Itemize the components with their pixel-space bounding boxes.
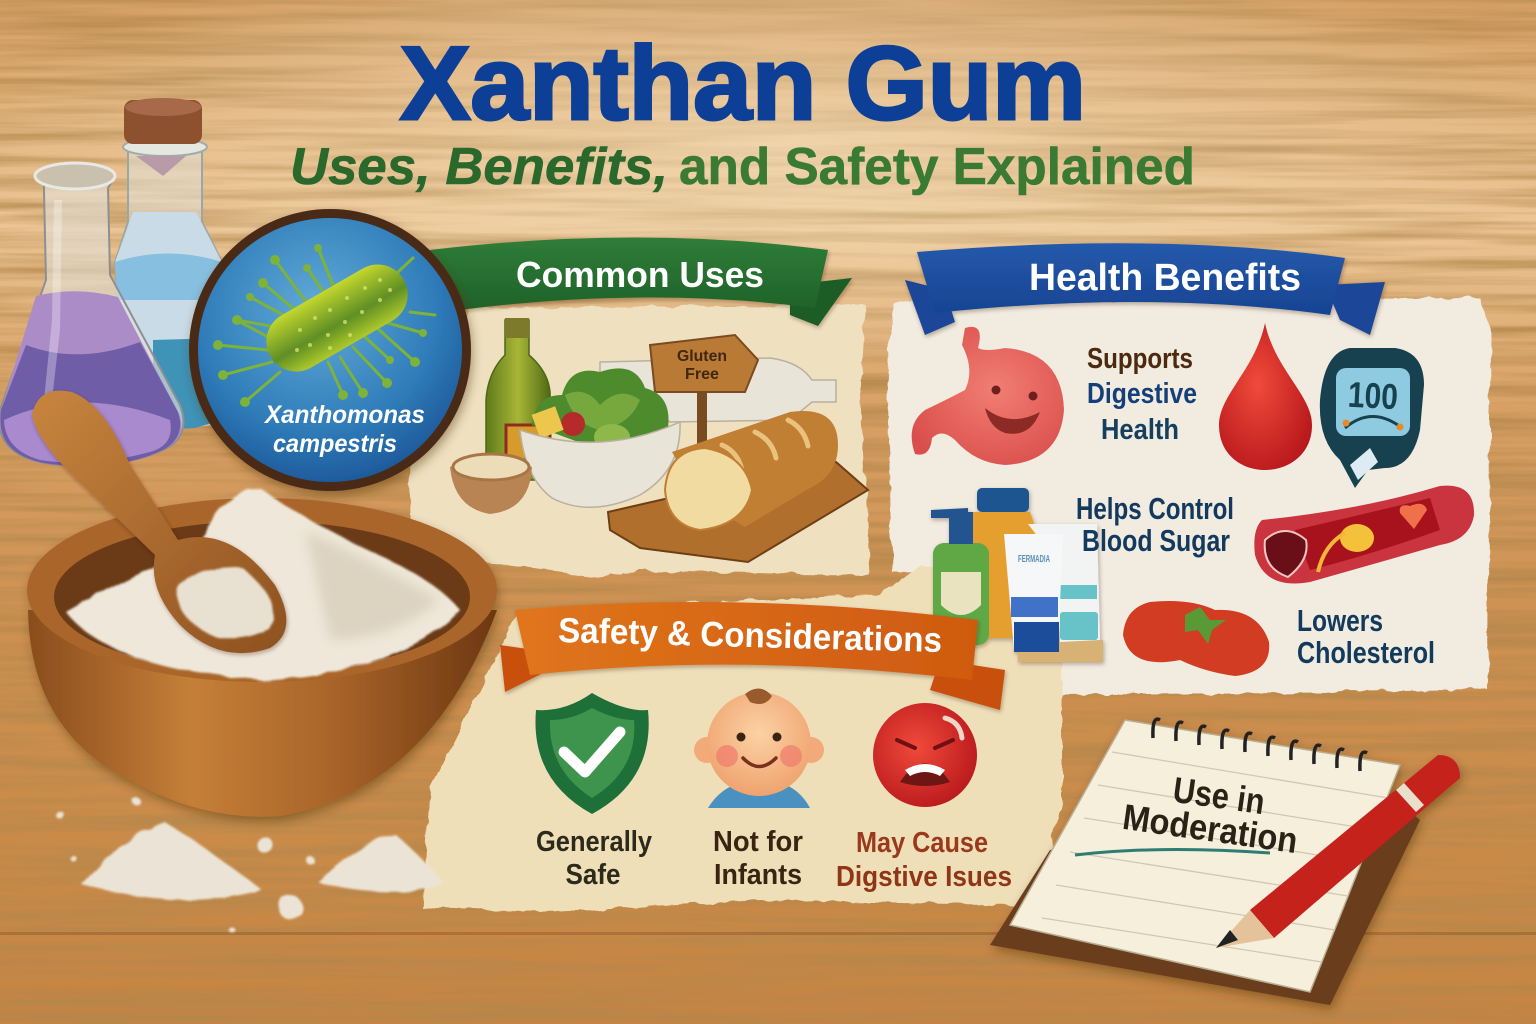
icon: spilled flour piles (56, 796, 445, 933)
text: may cause digestive issues: May Cause (856, 827, 988, 859)
icon: shield (535, 693, 649, 814)
banner: health benefits: Health Benefits (1029, 257, 1301, 299)
icon: notebook with pencil (990, 719, 1460, 1005)
icon: gluten free sign (650, 335, 758, 462)
banner: safety and considerations: Safety & Considerations (558, 611, 943, 660)
text: generally safe: Generally (536, 826, 652, 858)
icon: skincare bottles: FERMADIA (1018, 554, 1050, 565)
text: lowers cholesterol: Lowers (1297, 603, 1383, 638)
icon: purple flask (0, 163, 184, 466)
text: lowers cholesterol: Cholesterol (1297, 635, 1435, 670)
text: not for infants: Not for (713, 826, 803, 858)
icon: wooden bowl with flour (27, 490, 497, 817)
panel: common uses (410, 238, 870, 578)
text: helps control blood sugar (1076, 491, 1234, 558)
icon: bacterium (213, 244, 435, 407)
icon: small dish (450, 454, 532, 514)
panel paper (410, 305, 870, 578)
text: not for infants (713, 826, 803, 891)
badge: Xanthomonas campestris (189, 209, 471, 491)
text: supports digestive health: Health (1101, 414, 1179, 446)
icon: artery (1254, 486, 1474, 583)
panel paper (888, 298, 1490, 695)
text: supports digestive health: Digestive (1087, 378, 1197, 410)
banner: common uses: Common Uses (516, 254, 764, 295)
text: use in moderation: Moderation (1120, 796, 1300, 861)
panel paper (422, 565, 1062, 912)
text: helps control blood sugar: Helps Control (1076, 491, 1234, 526)
text: supports digestive health (1087, 343, 1197, 446)
subtitle (290, 138, 1195, 196)
panel: safety and considerations (422, 488, 1103, 912)
text: helps control blood sugar: Blood Sugar (1082, 523, 1230, 558)
text: generally safe (536, 826, 652, 891)
icon: oil bottle (486, 318, 550, 480)
icon: skincare bottles (931, 488, 1103, 662)
text: use in moderation (1120, 769, 1300, 861)
icon: gluten free sign: Free (685, 366, 719, 383)
text: generally safe: Safe (566, 859, 620, 891)
icon: salad bowl (520, 368, 680, 507)
icon: baby (694, 688, 824, 808)
title: Xanthan Gum (400, 26, 1086, 142)
banner: safety and considerations (500, 602, 1005, 710)
subtitle: Uses, Benefits, (290, 138, 668, 196)
label: Xanthomonas campestris: Xanthomonas (263, 401, 425, 429)
text: not for infants: Infants (714, 859, 802, 891)
panel: health benefits (888, 243, 1490, 695)
text: may cause digestive issues: Digstive Isues (836, 861, 1012, 893)
banner: common uses (430, 238, 852, 326)
subtitle: and Safety Explained (679, 138, 1195, 196)
icon: wooden spoon (32, 391, 286, 653)
text: use in moderation: Use in (1171, 769, 1267, 822)
label: Xanthomonas campestris: campestris (273, 430, 397, 458)
icon: gluten free sign: Gluten (677, 348, 727, 365)
icon: stoppered bottle with blue liquid (115, 98, 222, 430)
icon: red pencil (1216, 755, 1460, 948)
icon: bread on board (608, 411, 868, 562)
text: may cause digestive issues (836, 827, 1012, 893)
icon: glucose meter: 100 (1347, 374, 1399, 417)
icon: blood drop (1219, 323, 1312, 470)
text: supports digestive health: Supports (1087, 343, 1193, 375)
icon: upset face (873, 703, 977, 807)
icon: glucose meter (1320, 348, 1424, 488)
icon: milk jug (600, 358, 836, 422)
icon: stomach (912, 327, 1064, 465)
label: Xanthomonas campestris (263, 401, 425, 458)
icon: tomato (1123, 601, 1269, 676)
banner: health benefits (905, 243, 1385, 335)
text: lowers cholesterol (1297, 603, 1435, 670)
